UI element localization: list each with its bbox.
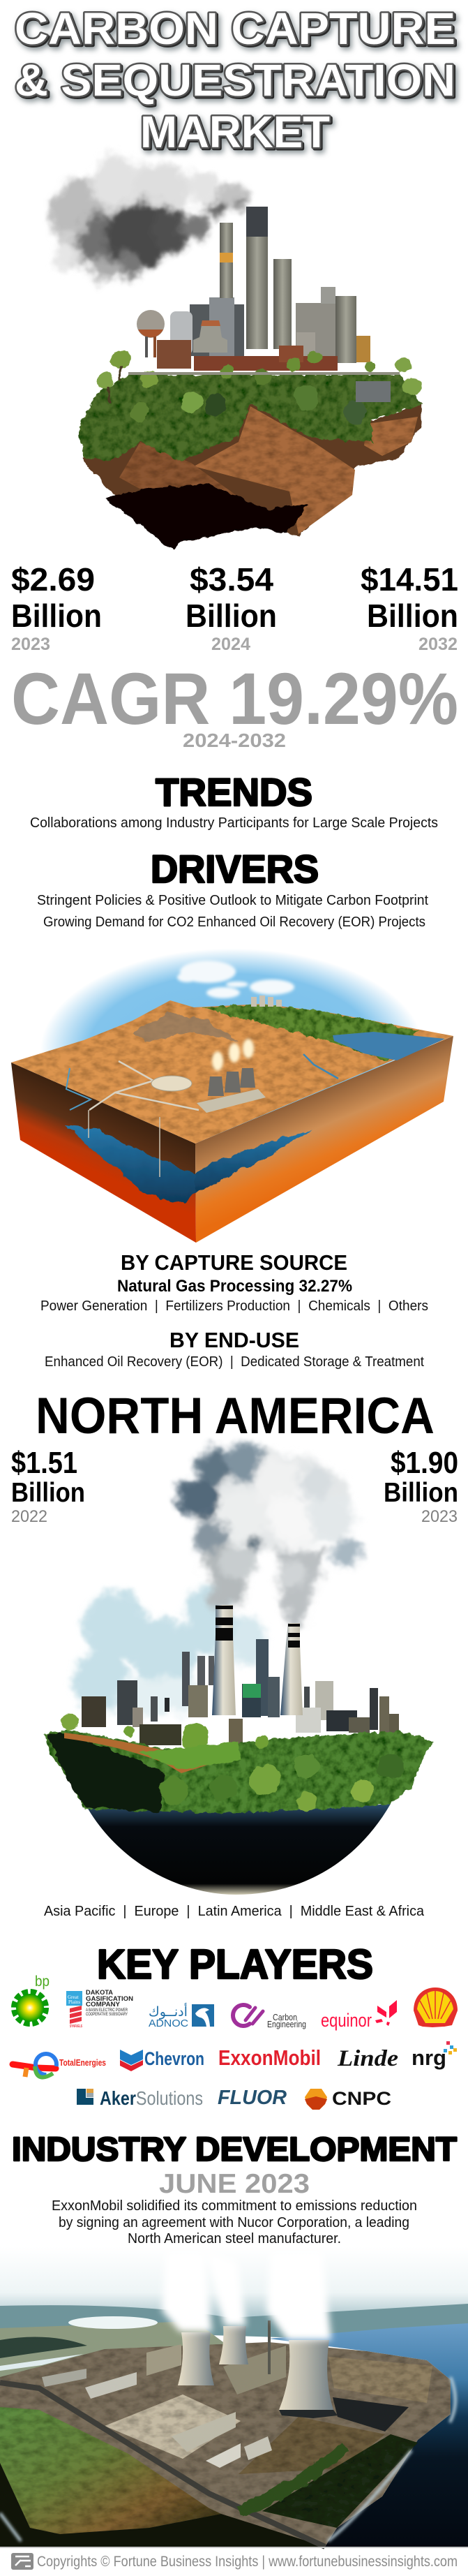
- segment: by capture source: Natural Gas Processing 32.27%: [117, 1277, 352, 1296]
- logo: Dakota Gasification: Plains: [68, 1999, 80, 2005]
- power plant platform: [197, 1089, 266, 1113]
- forest band: [45, 1730, 434, 1812]
- green valley: [202, 1004, 418, 1061]
- left face: [11, 1063, 196, 1243]
- other regions: Asia Pacific | Europe | Latin America | Middle East & Africa: [44, 1904, 425, 1919]
- photo: power plant on the coast: [0, 2246, 468, 2547]
- steam plumes: [162, 2251, 331, 2340]
- stat 2032: [361, 561, 458, 654]
- far lake: [68, 2316, 158, 2329]
- stat 2023: [11, 561, 102, 654]
- logo: nrg: nrg: [412, 2045, 446, 2070]
- title: MARKET: [140, 107, 330, 157]
- river: [303, 1054, 338, 1079]
- development text: by signing an agreement with Nucor Corporation, a leading: [59, 2215, 409, 2230]
- drivers text: Growing Demand for CO2 Enhanced Oil Recovery (EOR) Projects: [43, 915, 425, 930]
- footer logo: [11, 2553, 33, 2570]
- pale concrete yard: [105, 2394, 241, 2459]
- segment: by capture source: Power Generation | Fertilizers Production | Chemicals | Others: [40, 1298, 428, 1314]
- logo: Chevron: [120, 2048, 204, 2071]
- stat 2032: 2032: [418, 635, 458, 654]
- logo: Dakota Gasification: COOPERATIVE SUBSIDIARY: [86, 2013, 128, 2017]
- cooling towers with steam: [208, 1039, 255, 1096]
- logo: Dakota Gasification: A BASIN ELECTRIC POWER: [86, 2008, 128, 2013]
- aquifer right: [195, 1129, 312, 1194]
- tower 3 base: [279, 2410, 338, 2418]
- clouds: [177, 961, 294, 998]
- storage tank: [151, 1076, 192, 1091]
- right rock highlight: [364, 417, 418, 456]
- foreground trees: [61, 1712, 403, 1811]
- logo: equinor: [321, 2000, 397, 2031]
- distant fields: [0, 2321, 237, 2381]
- region heading: NORTH AMERICA: [36, 1388, 435, 1444]
- development text: [52, 2198, 417, 2246]
- key player logos: [13, 1974, 458, 2110]
- dark shade under rock: [105, 484, 308, 550]
- dark forest shade: [47, 1733, 164, 1812]
- smokestacks: [212, 1605, 303, 1715]
- factory buildings: [137, 207, 370, 371]
- sky dome: [40, 938, 424, 1142]
- logo: Shell: [414, 1987, 458, 2027]
- rock underside: [82, 403, 422, 550]
- trends text: Collaborations among Industry Participants for Large Scale Projects: [30, 815, 438, 831]
- logo: Linde: Linde: [337, 2046, 398, 2071]
- logo: ADNOC: ADNOC: [149, 2018, 188, 2029]
- cooling tower 1: [178, 2332, 214, 2385]
- well lines: [89, 1110, 160, 1177]
- logo: Fluor: FLUOR: [218, 2087, 287, 2109]
- tree line: [237, 2443, 349, 2517]
- logo: bp: [16, 1974, 50, 2022]
- highway: [0, 2383, 325, 2547]
- illustration: geological block cross-section: [11, 938, 453, 1243]
- logo: Carbon Engineering: [233, 2005, 306, 2029]
- cooling tower 2: [219, 2326, 248, 2364]
- logo: ExxonMobil: ExxonMobil: [218, 2045, 321, 2070]
- stat 2024: Billion: [186, 598, 277, 634]
- skyline buildings: [82, 1639, 399, 1751]
- logo: nrg: [412, 2041, 457, 2070]
- logo: Chevron: Chevron: [144, 2048, 204, 2069]
- dark foreground shore: [0, 2463, 325, 2547]
- white river: [0, 2354, 84, 2371]
- site ground: [0, 2342, 451, 2547]
- illustration: floating island with factory: [51, 155, 422, 550]
- logo: CNPC: [305, 2088, 391, 2110]
- title: [15, 3, 455, 157]
- stat 2024: [186, 561, 277, 654]
- drivers text: Stringent Policies & Positive Outlook to Mitigate Carbon Footprint: [37, 893, 428, 908]
- pipelines: [89, 1061, 199, 1110]
- factory blocks: [42, 2344, 286, 2468]
- tree clumps: [96, 350, 422, 424]
- right brown plot: [329, 2357, 432, 2403]
- development text: North American steel manufacturer.: [128, 2231, 341, 2246]
- segment: by capture source: [40, 1250, 428, 1314]
- logo: bp: bp: [35, 1974, 50, 1990]
- water: [269, 2323, 468, 2547]
- key players heading: KEY PLAYERS: [97, 1941, 373, 1987]
- trends heading: TRENDS: [156, 770, 312, 814]
- surf: [0, 2377, 455, 2541]
- segment: by end-use: Enhanced Oil Recovery (EOR) | Dedicated Storage & Treatment: [45, 1354, 424, 1370]
- region stat 2023: [384, 1446, 458, 1526]
- distant city: [251, 995, 282, 1007]
- rock highlight: [194, 406, 355, 534]
- date: JUNE 2023: [159, 2169, 310, 2199]
- logo: TotalEnergies: TotalEnergies: [59, 2057, 106, 2068]
- dark tree band: [0, 2337, 87, 2358]
- stats: market size: [11, 561, 458, 654]
- segment: by end-use: BY END-USE: [169, 1328, 299, 1352]
- logo: Dakota Gasification: Great: [68, 1994, 79, 2000]
- industry development heading: INDUSTRY DEVELOPMENT: [12, 2131, 457, 2168]
- title: & SEQUESTRATION: [15, 55, 455, 105]
- footer: [0, 2547, 468, 2570]
- illustration: city on half globe with smokestacks: [45, 1443, 434, 1895]
- footer rule: [0, 2547, 468, 2548]
- logo: Dakota Gasification: SYNFUELS: [70, 2024, 82, 2029]
- half globe ocean: [85, 1804, 391, 1895]
- segment: by capture source: BY CAPTURE SOURCE: [121, 1250, 347, 1275]
- region stat 2022: $1.51: [11, 1446, 77, 1480]
- region stat 2022: Billion: [11, 1478, 85, 1508]
- segment: by end-use: [45, 1328, 424, 1370]
- stack: [268, 2320, 271, 2374]
- drivers heading: DRIVERS: [151, 847, 319, 891]
- region stat 2023: Billion: [384, 1478, 458, 1508]
- smoke cloud: [51, 155, 246, 281]
- stat 2032: Billion: [367, 598, 458, 634]
- development text: ExxonMobil solidified its commitment to emissions reduction: [52, 2198, 417, 2214]
- mountain shadow: [133, 1012, 237, 1042]
- logo: equinor: equinor: [321, 2010, 372, 2031]
- logo: Dakota Gasification: COMPANY: [86, 2001, 120, 2008]
- logo: Aker Solutions: AkerSolutions: [100, 2087, 203, 2109]
- cooling tower 3: [279, 2340, 333, 2410]
- stat 2024: $3.54: [190, 561, 273, 598]
- region stat 2023: 2023: [421, 1507, 458, 1526]
- logo: Carbon Engineering: Carbon: [273, 2012, 297, 2022]
- sky: [0, 2246, 468, 2323]
- stat 2023: $2.69: [11, 561, 95, 598]
- logo: CNPC: CNPC: [332, 2088, 391, 2109]
- logo: Dakota Gasification: GASIFICATION: [86, 1995, 133, 2002]
- dark shadow area: [333, 2397, 409, 2431]
- title: CARBON CAPTURE: [15, 3, 455, 54]
- aquifer left: [66, 1125, 195, 1204]
- logo: Dakota Gasification: [66, 1989, 133, 2029]
- stat 2023: Billion: [11, 598, 102, 634]
- lower plot: [239, 2417, 385, 2474]
- right face: [195, 1036, 453, 1243]
- drivers text: [37, 893, 428, 930]
- region stat 2022: 2022: [11, 1507, 47, 1526]
- dark shore strip: [262, 2434, 418, 2528]
- logo: TotalEnergies: [13, 2054, 106, 2078]
- stat 2023: 2023: [11, 635, 50, 654]
- land surface: [11, 1000, 453, 1143]
- distant land: [0, 2304, 468, 2370]
- logo: ADNOC: أدنــوك: [149, 2003, 188, 2020]
- region stat 2022: [11, 1446, 85, 1526]
- road and dirt path: [64, 1733, 237, 1773]
- logo: Carbon Engineering: Engineering: [267, 2019, 306, 2029]
- lake: [333, 1032, 445, 1060]
- green field: [0, 2407, 221, 2534]
- region stat 2023: $1.90: [391, 1446, 458, 1480]
- logo: ADNOC: [149, 2003, 214, 2029]
- small side building: [356, 381, 391, 402]
- smoke plumes: [178, 1443, 359, 1627]
- stat 2024: 2024: [211, 635, 250, 654]
- left rock highlight: [119, 442, 269, 510]
- pale blue clouds: [73, 1585, 266, 1716]
- grass top: [79, 374, 422, 461]
- logo: Dakota Gasification: DAKOTA: [86, 1989, 114, 1996]
- road: [128, 372, 400, 375]
- CAGR period: 2024-2032: [183, 730, 286, 751]
- stat 2032: $14.51: [361, 561, 458, 598]
